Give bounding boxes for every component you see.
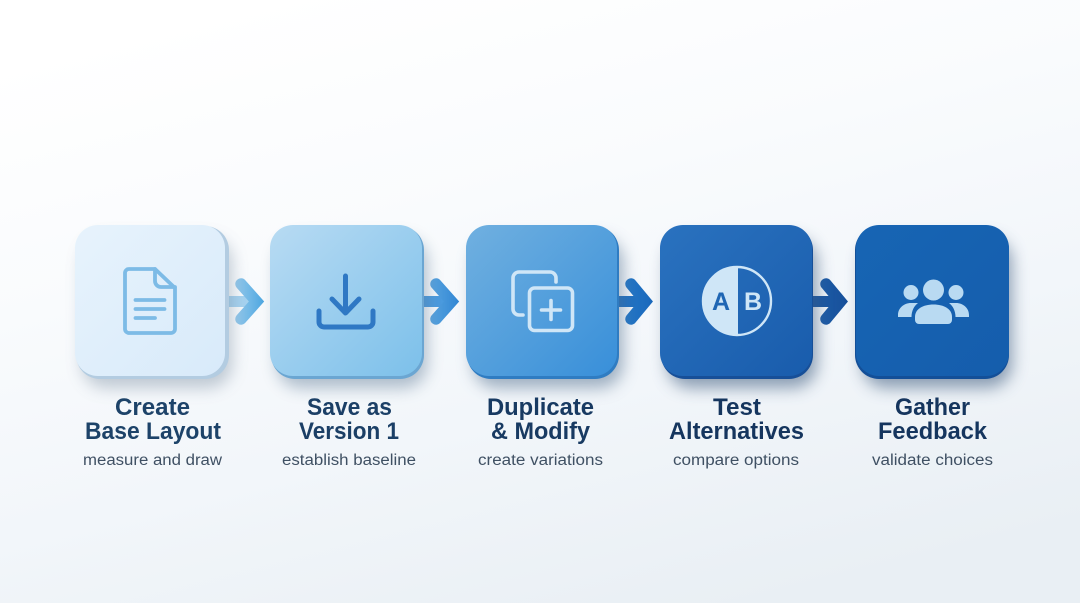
label: duplicate and modify: Duplicate <box>487 394 594 421</box>
arrow 4 <box>813 284 845 319</box>
label: gather feedback: Gather <box>895 394 970 421</box>
label: create base layout: measure and draw <box>83 452 223 469</box>
label: test alternatives: compare options <box>673 452 799 469</box>
step 1: create base layout <box>75 225 232 388</box>
label: save as version 1: Version 1 <box>299 418 399 445</box>
icon: a/b test: A <box>712 288 730 316</box>
label: duplicate and modify: create variations <box>478 452 603 469</box>
label: save as version 1: Save as <box>307 394 392 421</box>
icon: document <box>125 269 175 333</box>
step 4: test alternatives <box>660 225 817 388</box>
label: create base layout <box>83 394 223 469</box>
step 5: gather feedback <box>855 225 1012 388</box>
label: test alternatives <box>669 394 804 469</box>
label: gather feedback: validate choices <box>872 452 993 469</box>
icon: people <box>898 280 969 324</box>
icon: a/b test <box>703 266 771 336</box>
arrow 1 <box>228 284 260 319</box>
label: test alternatives: Alternatives <box>669 418 804 445</box>
label: test alternatives: Test <box>713 394 761 421</box>
arrow 2 <box>423 284 455 319</box>
label: gather feedback <box>872 394 993 469</box>
label: create base layout: Base Layout <box>85 418 221 445</box>
label: create base layout: Create <box>115 394 190 421</box>
label: duplicate and modify: & Modify <box>491 418 591 445</box>
arrow 3 <box>618 284 650 319</box>
icon: duplicate <box>513 272 572 330</box>
icon: a/b test: B <box>744 288 762 316</box>
label: duplicate and modify <box>478 394 603 469</box>
label: gather feedback: Feedback <box>878 418 988 445</box>
step 2: save as version 1 <box>270 225 427 388</box>
icon: download <box>319 276 373 327</box>
step 3: duplicate and modify <box>466 225 623 388</box>
label: save as version 1: establish baseline <box>282 452 416 469</box>
label: save as version 1 <box>282 394 416 469</box>
